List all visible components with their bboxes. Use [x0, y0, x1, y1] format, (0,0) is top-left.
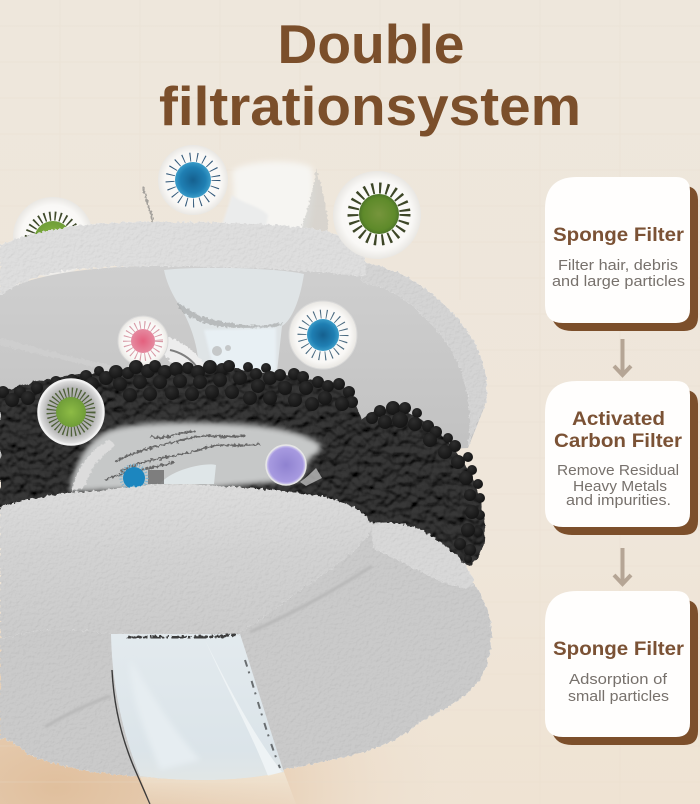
title: filtrationsystem — [159, 75, 581, 137]
panel: sponge filter 2 — [545, 591, 698, 745]
description — [557, 462, 679, 509]
virus bubble: small blue — [121, 465, 147, 491]
virus bubble: mid blue — [289, 301, 357, 369]
heading: Carbon Filter — [554, 430, 682, 452]
arrow 1 — [614, 339, 631, 375]
description: and large particles — [552, 273, 685, 290]
virus bubble: pink — [118, 316, 168, 366]
heading: Sponge Filter — [553, 224, 684, 246]
description: Adsorption of — [569, 671, 668, 688]
water column between sponges — [150, 268, 304, 372]
carbon inner cavity with water — [70, 422, 321, 492]
description: small particles — [568, 688, 669, 705]
title — [159, 13, 581, 137]
description: Heavy Metals — [573, 478, 667, 495]
description — [552, 257, 685, 290]
carbon filter layer — [0, 360, 485, 566]
upper sponge: right rim and underside — [0, 262, 487, 470]
lower sponge: top disc — [0, 485, 372, 640]
panel: activated carbon filter — [545, 381, 698, 535]
arrow 2 — [614, 548, 631, 584]
virus bubble: green in carbon — [38, 379, 104, 445]
water splash above the top sponge — [143, 162, 328, 262]
virus bubble: top blue — [158, 145, 228, 215]
panel: sponge filter 1 — [545, 177, 698, 331]
heading: Activated — [572, 408, 665, 430]
virus bubble: left green (behind sponge) — [13, 197, 93, 277]
description: Filter hair, debris — [558, 257, 678, 274]
lower sponge: outer lower disc — [0, 522, 491, 778]
heading: Sponge Filter — [553, 638, 684, 660]
virus bubble: right green — [333, 171, 421, 259]
description: and impurities. — [566, 492, 671, 509]
description: Remove Residual — [557, 462, 679, 479]
water outflow — [111, 634, 296, 804]
carbon body — [0, 366, 484, 566]
lower sponge: right upper segment — [372, 523, 473, 588]
virus bubble: purple — [266, 445, 322, 486]
title: Double — [278, 13, 464, 75]
heading — [554, 408, 682, 452]
lower sponge creases — [45, 566, 372, 727]
description — [568, 671, 669, 705]
carbon beads along the upper edge — [0, 360, 485, 563]
upper sponge: top disc — [0, 222, 366, 296]
